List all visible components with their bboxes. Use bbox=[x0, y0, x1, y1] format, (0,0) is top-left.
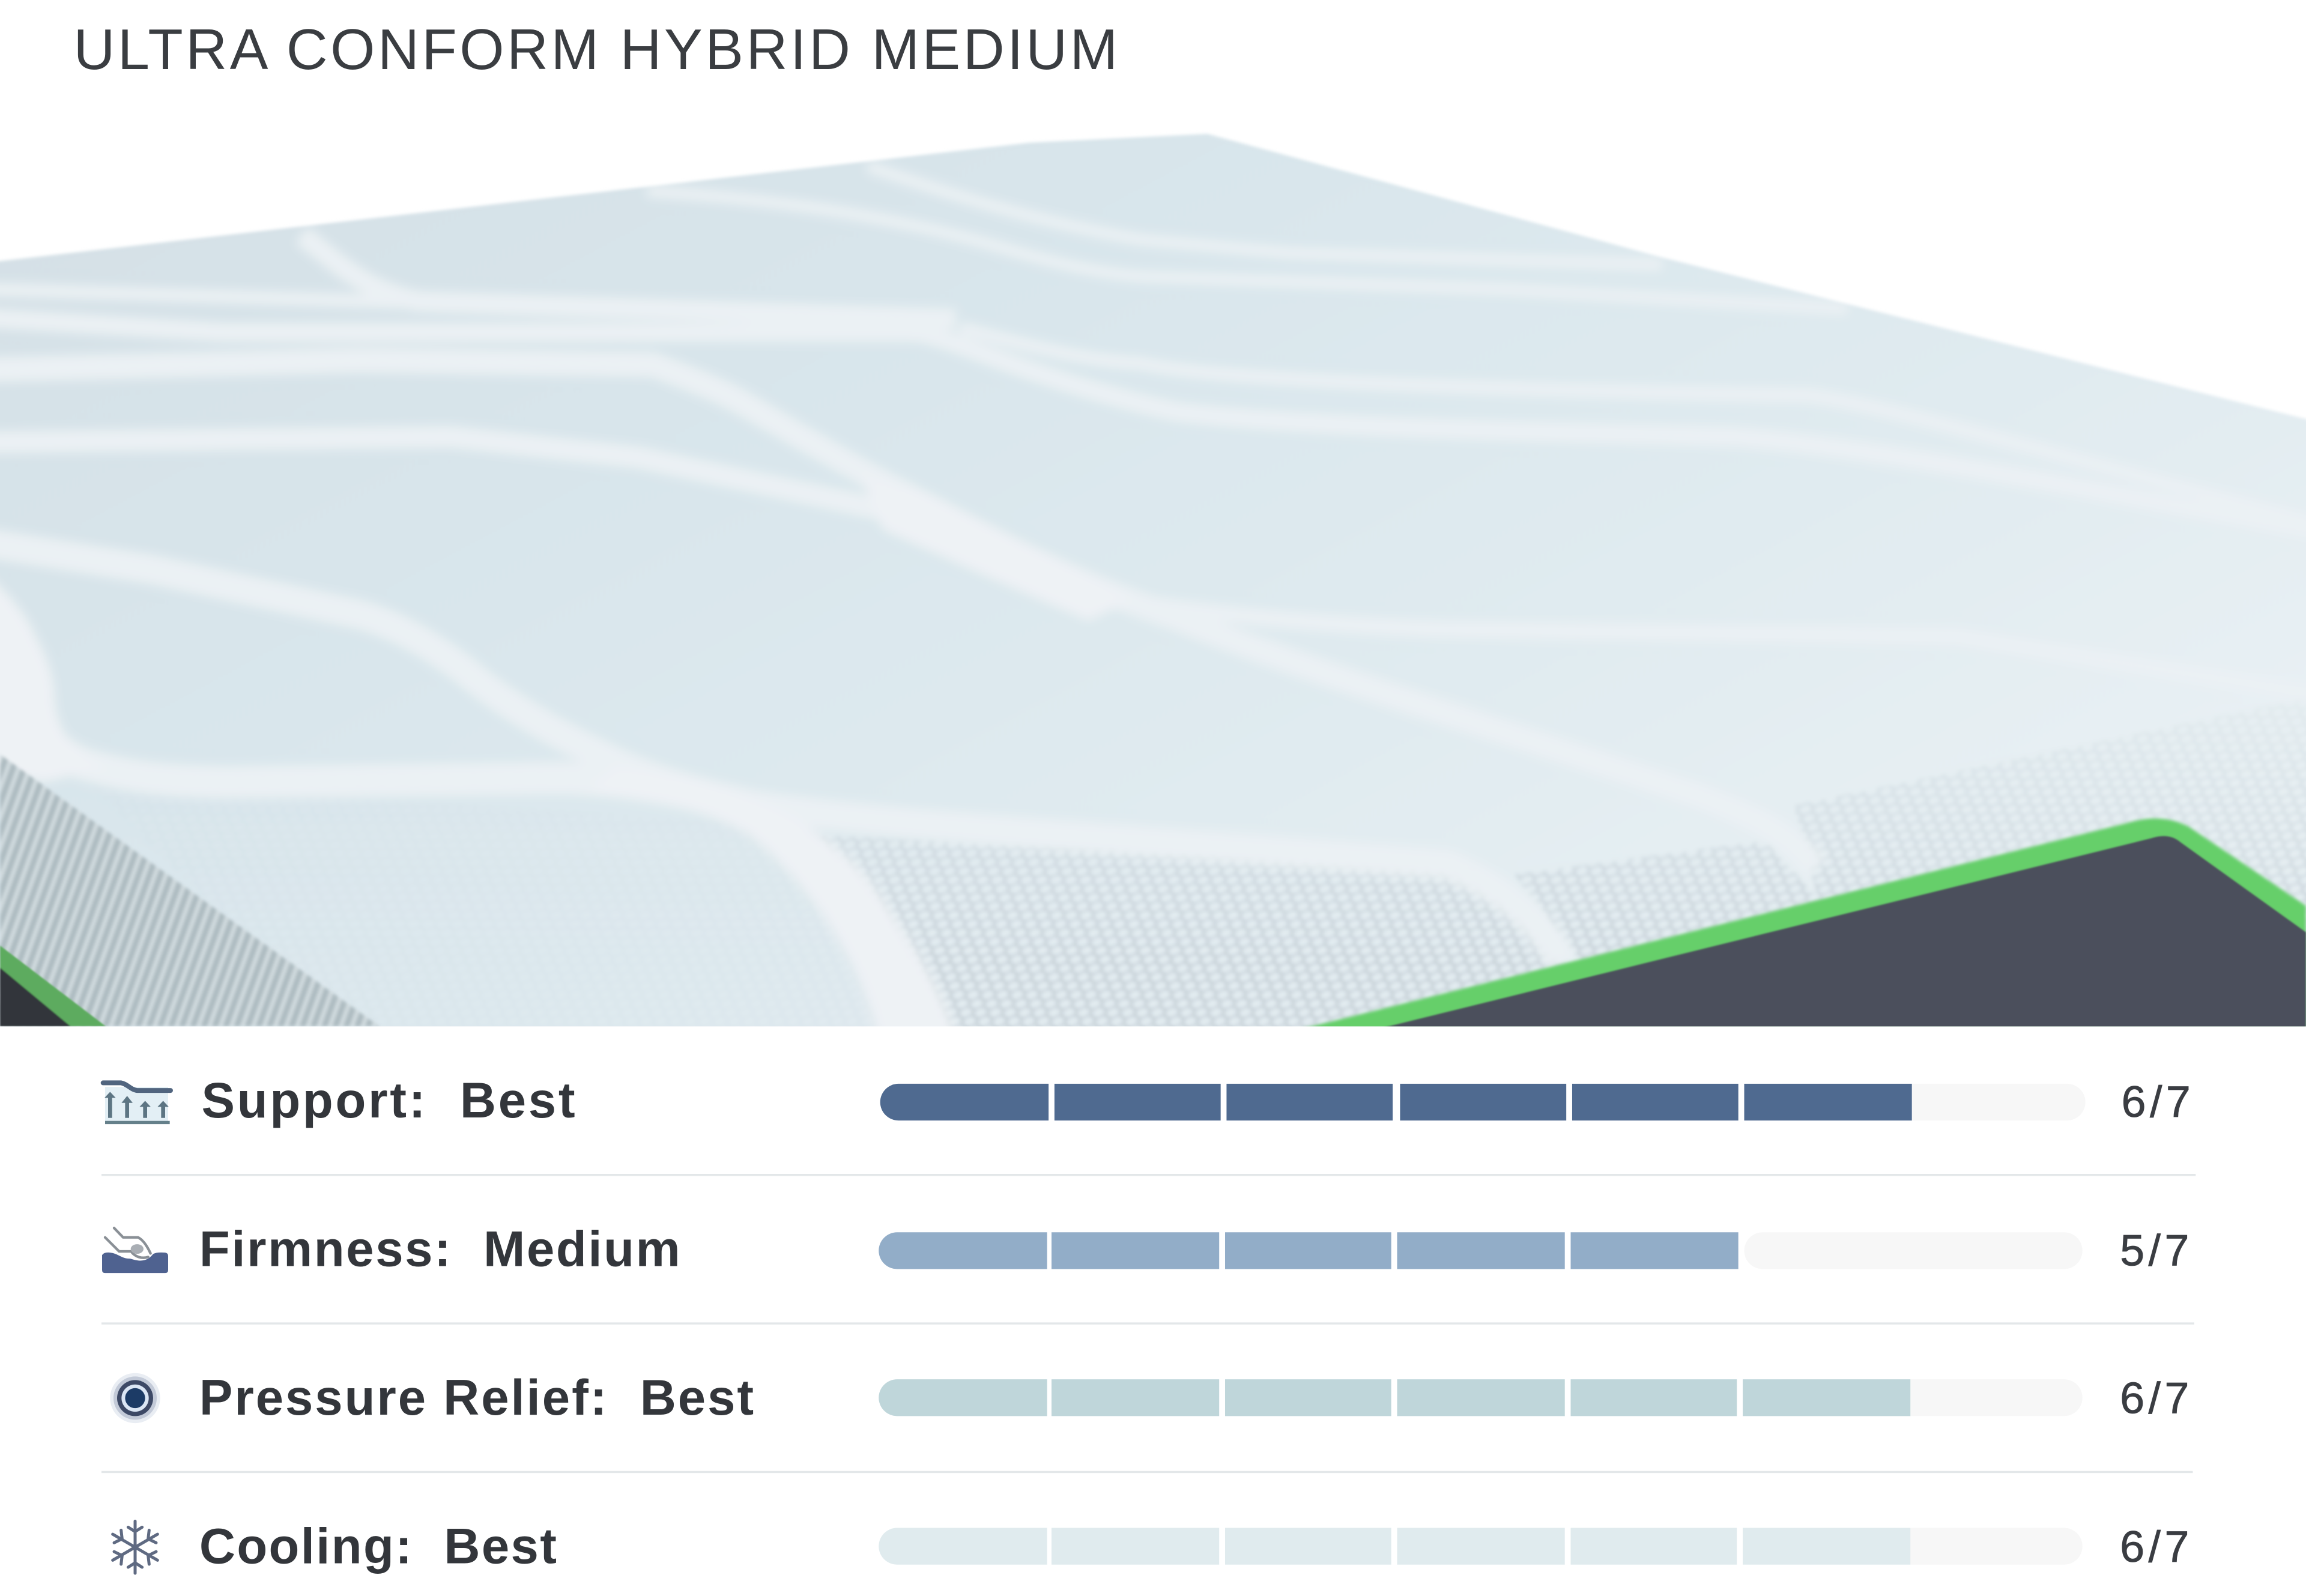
score: cooling: 6/7 bbox=[2120, 1522, 2189, 1571]
label: cooling: Cooling: Best bbox=[199, 1518, 557, 1574]
row: firmness bbox=[102, 1221, 2189, 1277]
mattress illustration bbox=[0, 118, 2306, 1074]
icon: pressure rings bbox=[110, 1373, 160, 1423]
rating bar: support 6 of 7 bbox=[880, 1084, 2086, 1120]
row: pressure relief bbox=[110, 1370, 2189, 1425]
icon: snowflake bbox=[113, 1521, 157, 1573]
rating bar: pressure relief 6 of 7 bbox=[879, 1379, 2083, 1416]
right dark base with green piping bbox=[1300, 818, 2306, 1029]
score: support: 6/7 bbox=[2122, 1077, 2191, 1126]
rating bar: cooling 6 of 7 bbox=[879, 1528, 2083, 1565]
score: firmness: 5/7 bbox=[2120, 1225, 2189, 1275]
title: ULTRA CONFORM HYBRID MEDIUM bbox=[73, 18, 1118, 82]
left dark corner with green piping bbox=[0, 946, 106, 1026]
rating bar: firmness 5 of 7 bbox=[879, 1232, 2083, 1269]
icon: support arrows bbox=[103, 1083, 171, 1122]
mattress top surface bbox=[0, 118, 2306, 1074]
icon: hand pressing mattress bbox=[102, 1228, 168, 1273]
row: support bbox=[103, 1072, 2191, 1128]
flowing quilt bands bbox=[0, 162, 2094, 1027]
mattress side panel bbox=[0, 754, 380, 1026]
label: firmness: Firmness: Medium bbox=[199, 1221, 680, 1277]
quilted honeycomb texture bbox=[838, 741, 2306, 1027]
label: support: Support: Best bbox=[202, 1072, 575, 1128]
row: cooling bbox=[113, 1518, 2189, 1574]
score: pressure relief: 6/7 bbox=[2120, 1373, 2189, 1422]
label: pressure relief: Pressure Relief: Best bbox=[199, 1370, 754, 1425]
